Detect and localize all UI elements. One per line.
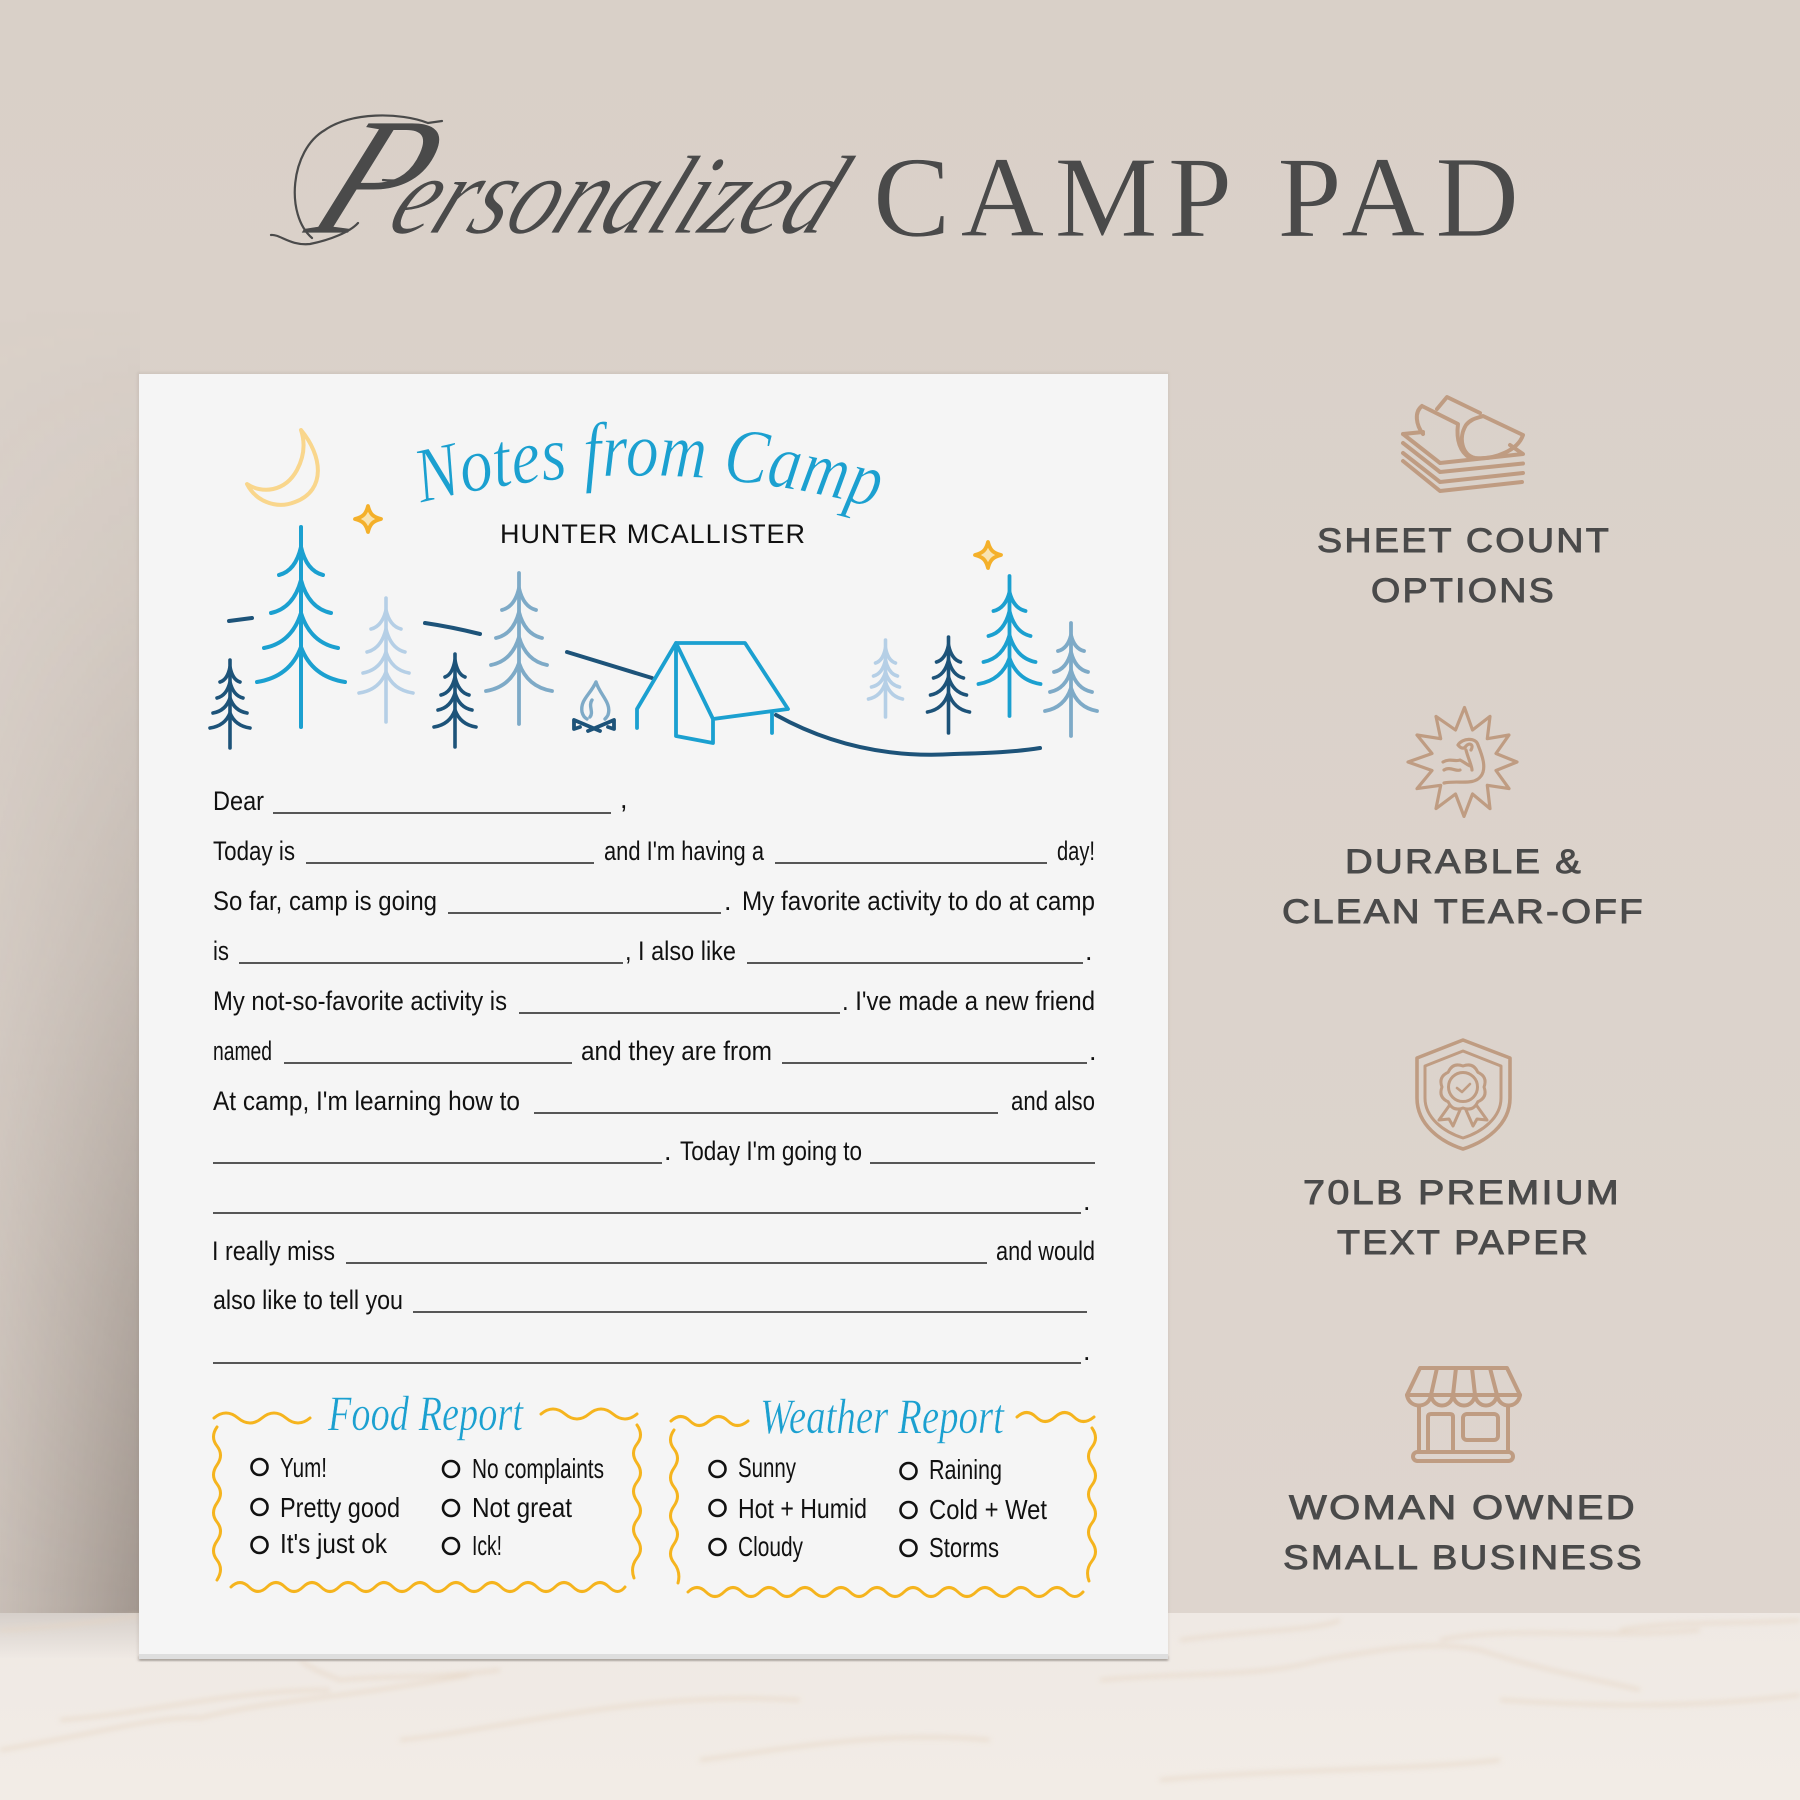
line: named: named xyxy=(213,1036,272,1066)
line: So far: . xyxy=(724,886,732,916)
options weather: Hot + Humid xyxy=(738,1493,867,1524)
icon: campfire xyxy=(574,682,614,731)
letter form xyxy=(212,784,1097,1366)
line: not-so-favorite: My not-so-favorite activity is xyxy=(213,986,507,1016)
options food: No complaints xyxy=(472,1453,604,1484)
feature label xyxy=(1317,522,1611,610)
line: today going: . xyxy=(664,1136,672,1166)
line: is: . xyxy=(1085,936,1093,966)
line: named: and they are from xyxy=(581,1036,772,1066)
pad heading: Notes from Camp: Notes from Camp xyxy=(416,421,880,518)
feature label: SMALL BUSINESS xyxy=(1283,1539,1644,1577)
options food: Ick! xyxy=(472,1530,502,1561)
line: Today is: Today is xyxy=(213,836,295,866)
title script word xyxy=(271,84,888,270)
line: named xyxy=(213,1036,1097,1066)
line: not-so-favorite xyxy=(213,986,1095,1016)
line: blank end: . xyxy=(1083,1336,1091,1366)
line: So far: So far, camp is going xyxy=(213,886,437,916)
icon: star left xyxy=(355,506,381,532)
line: Dear: Dear xyxy=(213,786,264,816)
tree: steel blue centre xyxy=(486,573,552,724)
options food: It's just ok xyxy=(280,1528,388,1559)
line: blank: . xyxy=(1083,1186,1091,1216)
feature label: CLEAN TEAR-OFF xyxy=(1282,893,1645,931)
feature label: OPTIONS xyxy=(1371,572,1556,610)
options weather: Cold + Wet xyxy=(929,1494,1047,1525)
tree: dark centre xyxy=(434,654,476,747)
line: Today is xyxy=(213,836,1095,866)
options food: Not great xyxy=(472,1492,572,1523)
line: really miss: and would xyxy=(996,1236,1095,1266)
feature label xyxy=(1303,1174,1621,1262)
icon: muscle burst xyxy=(1408,708,1517,816)
panel: food report xyxy=(214,1385,640,1592)
line: learning: At camp, I'm learning how to xyxy=(213,1086,520,1116)
feature: premium paper xyxy=(1303,1040,1621,1262)
line: So far: My favorite activity to do at camp xyxy=(742,886,1095,916)
options weather: Storms xyxy=(929,1532,999,1563)
feature: sheet count xyxy=(1317,397,1611,610)
line: Dear: , xyxy=(620,784,628,814)
line: also like: also like to tell you xyxy=(213,1285,403,1315)
tree: blue right xyxy=(978,576,1040,716)
title script word: ersonalized xyxy=(373,134,866,258)
feature label: 70LB PREMIUM xyxy=(1303,1174,1621,1212)
icon: tent xyxy=(637,643,788,743)
feature label: DURABLE & xyxy=(1345,843,1583,881)
line: really miss xyxy=(212,1236,1095,1266)
line: today going: Today I'm going to xyxy=(680,1136,862,1166)
line: Today is: and I'm having a xyxy=(604,836,765,866)
feature label: SHEET COUNT xyxy=(1317,522,1611,560)
line: is: , I also like xyxy=(625,936,736,966)
heading weather report: Weather Report xyxy=(760,1388,1005,1444)
feature label: TEXT PAPER xyxy=(1337,1224,1590,1262)
wavy frame weather xyxy=(670,1412,1096,1596)
line: learning xyxy=(213,1086,1095,1116)
options weather: Sunny xyxy=(738,1452,796,1483)
icon: storefront xyxy=(1407,1368,1520,1461)
line: Today is: day! xyxy=(1057,836,1095,866)
tree: steel blue far right xyxy=(1045,623,1097,736)
line: is xyxy=(213,936,1093,966)
line: is: is xyxy=(213,936,229,966)
line: Dear xyxy=(213,784,628,816)
line: really miss: I really miss xyxy=(212,1236,335,1266)
line: today going xyxy=(213,1136,1095,1166)
marble floor xyxy=(0,1613,1800,1800)
options food xyxy=(252,1452,604,1561)
feature: durable xyxy=(1282,708,1645,931)
icon: crescent moon xyxy=(247,430,318,505)
options food: Yum! xyxy=(280,1452,327,1483)
options weather xyxy=(710,1452,1047,1563)
ground line segments xyxy=(229,618,1040,755)
wavy frame food xyxy=(214,1409,640,1592)
title xyxy=(271,84,1519,270)
title serif words: CAMP PAD xyxy=(873,134,1519,262)
title script word: P xyxy=(284,84,471,270)
feature: woman owned xyxy=(1283,1368,1644,1577)
feature label xyxy=(1283,1489,1644,1577)
pad cast shadow on wall xyxy=(0,570,139,1613)
feature label: WOMAN OWNED xyxy=(1289,1489,1637,1527)
feature label xyxy=(1282,843,1645,931)
line: named: . xyxy=(1089,1036,1097,1066)
options weather: Cloudy xyxy=(738,1531,803,1562)
options weather: Raining xyxy=(929,1454,1002,1485)
panel: notepad sheet xyxy=(137,372,1169,1661)
icon: star right xyxy=(975,542,1001,568)
icon: paper stack xyxy=(1403,397,1523,491)
tree: pale blue xyxy=(359,598,413,722)
line: So far xyxy=(213,886,1095,916)
camp scene illustration xyxy=(210,527,1097,755)
icon: shield with rosette xyxy=(1417,1040,1510,1149)
line: not-so-favorite: . I've made a new friend xyxy=(842,986,1095,1016)
panel: weather report xyxy=(670,1388,1096,1596)
personalized name: HUNTER MCALLISTER xyxy=(500,519,805,549)
heading food report: Food Report xyxy=(327,1385,524,1441)
line: learning: and also xyxy=(1011,1086,1095,1116)
tree: small dark far left xyxy=(210,660,250,748)
tree: dark right xyxy=(928,637,970,733)
tree: pale blue right xyxy=(868,640,902,717)
tree: large blue left xyxy=(257,527,345,727)
options food: Pretty good xyxy=(280,1492,400,1523)
